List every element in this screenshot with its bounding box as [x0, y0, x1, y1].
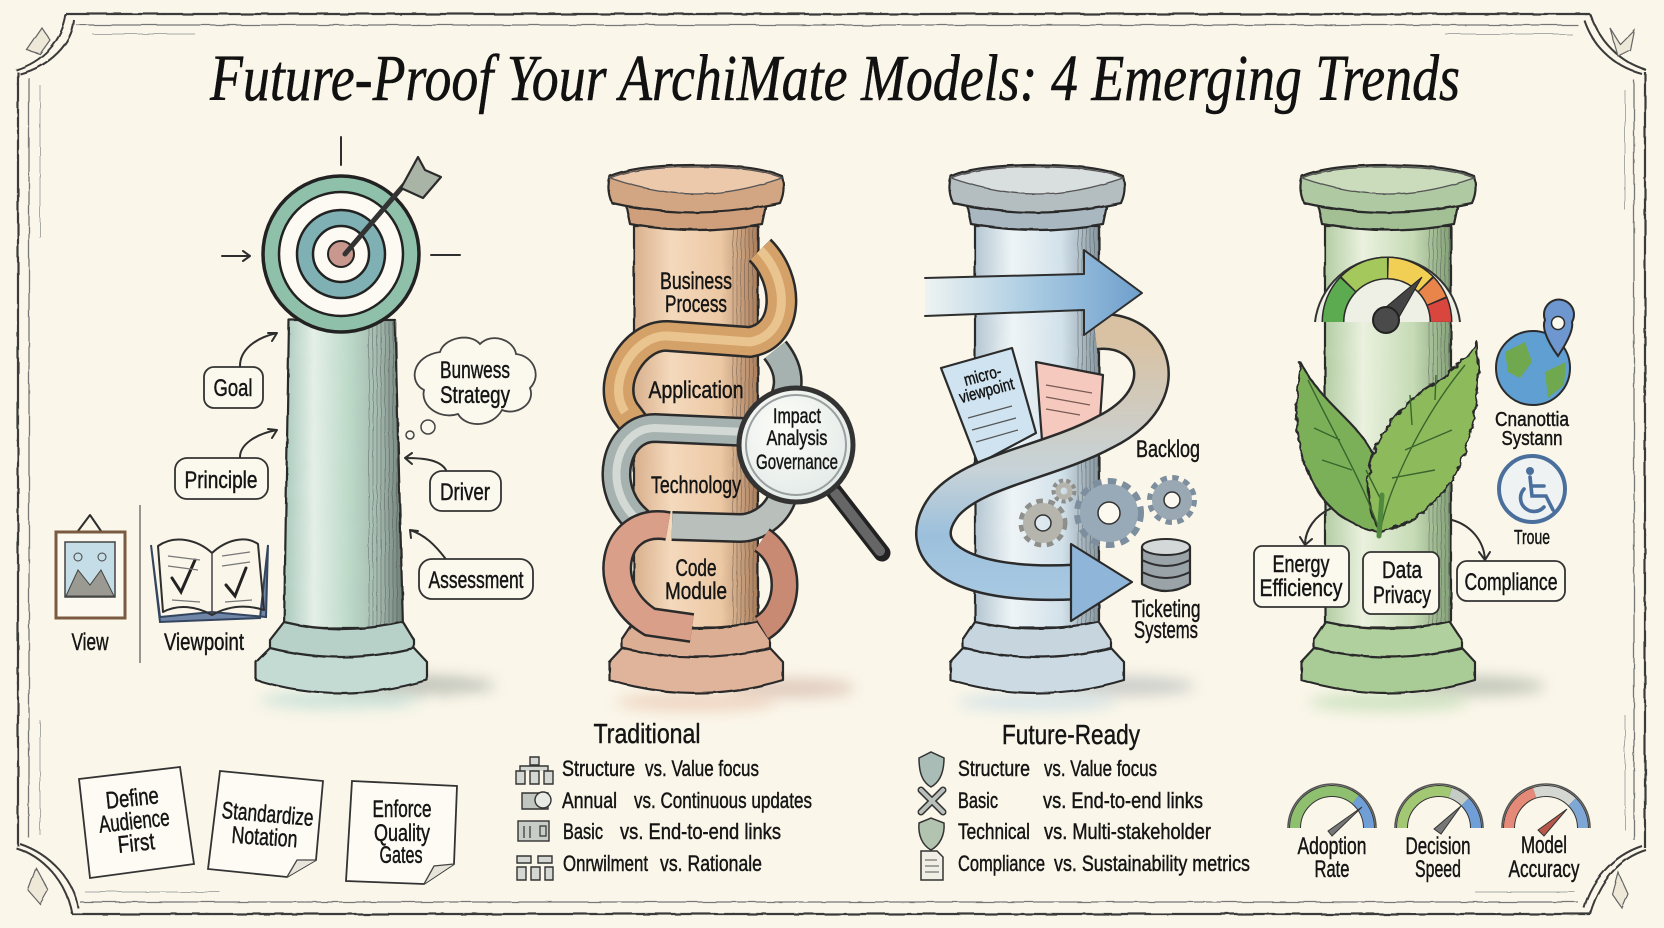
divider	[139, 505, 141, 663]
pillar 2 column	[608, 165, 784, 693]
note: Define Audience First: Audience	[97, 804, 171, 839]
icon: magnifier	[739, 388, 882, 553]
layer text: Code Module: Code	[676, 555, 716, 582]
row: Basic vs. End-to-end links: vs. End-to-end links	[1043, 788, 1203, 813]
label: Cnanottia Systann	[1495, 409, 1570, 450]
heading: Traditional: Traditional	[594, 718, 700, 749]
label: Compliance	[1452, 520, 1565, 601]
icon: open book with checks	[151, 539, 268, 622]
note: Standardize Notation: Standardize	[221, 797, 315, 832]
chain link: orange	[619, 250, 781, 432]
icon: database	[1142, 539, 1190, 591]
gauge: Decision Speed	[1395, 784, 1483, 883]
panel: pillar 1 target	[175, 137, 536, 709]
panel: pillar 2 layered stack	[608, 165, 882, 711]
panel: future-ready list	[919, 719, 1250, 880]
panel: pillar 3 flow	[925, 165, 1200, 711]
arrow: top flow	[925, 250, 1142, 335]
chain link: gray to terracotta	[617, 470, 786, 628]
arrow: S-curve flow	[933, 332, 1151, 621]
row: Annual vs. Continuous updates	[522, 788, 812, 813]
row: Structure vs. Value focus	[516, 756, 759, 784]
document: micro-viewpoint	[941, 348, 1036, 464]
label: Goal	[204, 333, 277, 408]
row: Technical vs. Multi-stakeholder: vs. Multi-stakeholder	[1044, 819, 1211, 844]
row: Onrwilment vs. Rationale: Onrwilment	[563, 851, 648, 876]
chain link: gray	[616, 350, 788, 522]
icon: globe with pin	[1496, 300, 1574, 405]
panel: pillar 4 sustainability	[1254, 165, 1574, 711]
layer text: Business Process: Business	[660, 268, 732, 295]
row: Structure vs. Value focus	[919, 752, 1157, 787]
row: Technical vs. Multi-stakeholder: Technical	[958, 819, 1030, 844]
callout: Business Strategy cloud: Bunwess	[440, 357, 510, 384]
row: Compliance vs. Sustainability metrics: Compliance	[958, 851, 1045, 876]
note: Define Audience First: First	[116, 828, 156, 859]
row: Onrwilment vs. Rationale	[517, 851, 762, 880]
icon: accessibility badge	[1499, 456, 1565, 522]
gauge: Adoption Rate	[1288, 784, 1376, 883]
gauge: Decision Speed: Decision	[1406, 833, 1470, 860]
label: Assessment: Assessment	[428, 567, 524, 594]
row: Annual vs. Continuous updates: Annual	[562, 788, 617, 813]
layer text: Business Process: Process	[665, 291, 727, 318]
callout: Business Strategy cloud: Strategy	[440, 382, 510, 409]
note: Enforce Quality Gates: Quality	[374, 820, 430, 847]
icon: leaves	[1296, 342, 1478, 536]
label: Driver	[405, 453, 501, 511]
layer text: Code Module	[665, 555, 727, 605]
layer text: Technology: Technology	[651, 472, 741, 499]
row: Structure vs. Value focus: vs. Value focus	[645, 756, 759, 781]
label: Principle	[175, 429, 277, 499]
note: Standardize Notation: Notation	[231, 822, 298, 853]
label: Ticketing Systems	[1132, 596, 1200, 644]
icon: speedometer gauge	[1315, 258, 1460, 333]
row: Onrwilment vs. Rationale: vs. Rationale	[660, 851, 762, 876]
row: Basic vs. End-to-end links	[518, 819, 781, 844]
gauge: Model Accuracy: Accuracy	[1508, 856, 1580, 883]
row: Structure vs. Value focus: Structure	[958, 756, 1030, 781]
label: Cnanottia Systann: Cnanottia	[1495, 409, 1570, 431]
row: Technical vs. Multi-stakeholder	[919, 818, 1211, 850]
label: Assessment	[410, 530, 533, 599]
label: Energy Efficiency	[1254, 508, 1349, 607]
row: Basic vs. End-to-end links: vs. End-to-end links	[620, 819, 781, 844]
row: Structure vs. Value focus: vs. Value focus	[1044, 756, 1157, 781]
document: pink note	[1036, 362, 1103, 440]
heading: Future-Ready: Future-Ready	[1002, 719, 1140, 750]
pillar 4 column	[1300, 165, 1476, 693]
layer text: Business Process	[660, 268, 732, 318]
panel: sticky notes	[79, 767, 457, 884]
panel: KPI gauges	[1288, 784, 1590, 883]
gauge: Adoption Rate: Adoption	[1298, 833, 1366, 860]
label: Cnanottia Systann: Systann	[1502, 428, 1562, 450]
icon: bullseye target with arrow	[222, 137, 460, 332]
label: Driver: Driver	[440, 479, 490, 506]
label: Data Privacy: Privacy	[1373, 582, 1431, 609]
row: Annual vs. Continuous updates: vs. Continuous updates	[634, 788, 812, 813]
note: Enforce Quality Gates	[346, 781, 457, 884]
pillar 1 column	[256, 320, 495, 709]
label: Goal: Goal	[214, 375, 252, 402]
note: Define Audience First	[79, 767, 194, 878]
label: Energy Efficiency: Efficiency	[1260, 575, 1342, 602]
row: Basic vs. End-to-end links: Basic	[958, 788, 998, 813]
label: Backlog: Backlog	[1136, 436, 1200, 463]
document: micro-viewpoint: viewpoint	[957, 374, 1016, 407]
label: Principle: Principle	[184, 467, 258, 494]
layer text: Code Module: Module	[665, 578, 727, 605]
note: Enforce Quality Gates: Gates	[380, 842, 422, 869]
row: Basic vs. End-to-end links: Basic	[563, 819, 603, 844]
document: micro-viewpoint: micro-	[962, 362, 1003, 390]
note: Define Audience First: Define	[104, 782, 160, 815]
label: Data Privacy: Data	[1382, 557, 1423, 584]
icon: gears	[1023, 479, 1193, 543]
row: Compliance vs. Sustainability metrics: vs. Sustainability metrics	[1054, 851, 1250, 876]
label: View: View	[72, 629, 109, 656]
label: Viewpoint: Viewpoint	[164, 629, 244, 656]
row: Structure vs. Value focus: Structure	[562, 756, 635, 781]
gauge: Adoption Rate: Rate	[1314, 856, 1350, 883]
panel: traditional list	[516, 718, 812, 880]
label: Ticketing Systems: Ticketing	[1132, 596, 1200, 623]
gauge: Model Accuracy	[1502, 784, 1590, 883]
row: Basic vs. End-to-end links	[921, 788, 1203, 813]
note: Standardize Notation	[208, 771, 323, 877]
label: Compliance: Compliance	[1464, 569, 1558, 596]
icon: magnifier: Analysis	[766, 427, 828, 450]
label: Data Privacy	[1363, 552, 1439, 614]
icon: framed picture	[56, 515, 125, 618]
label: Energy Efficiency: Energy	[1272, 551, 1330, 578]
gauge: Model Accuracy: Model	[1521, 832, 1567, 859]
note: Enforce Quality Gates: Enforce	[372, 796, 432, 823]
label: Ticketing Systems: Systems	[1134, 617, 1198, 644]
gauge: Decision Speed: Speed	[1415, 856, 1461, 883]
callout: Business Strategy cloud	[406, 338, 536, 439]
pillar 3 column	[949, 165, 1125, 693]
layer text: Application: Application	[648, 377, 744, 404]
label: Troue: Troue	[1514, 527, 1550, 549]
row: Compliance vs. Sustainability metrics	[921, 851, 1250, 880]
icon: magnifier: Impact	[773, 405, 821, 428]
icon: magnifier: Governance	[756, 451, 838, 474]
